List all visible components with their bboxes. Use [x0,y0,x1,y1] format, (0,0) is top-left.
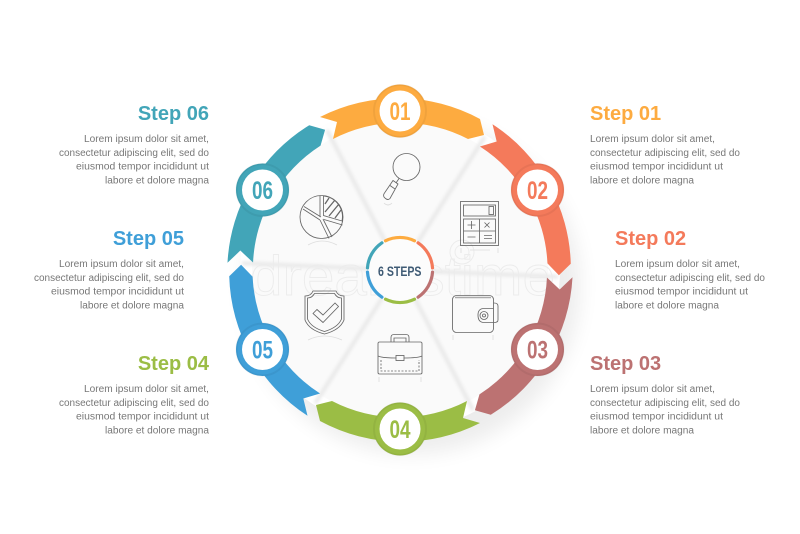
text block: step 02 [615,228,765,311]
badge 06: 06 [252,177,273,205]
icon: magnifier [384,154,420,205]
text block: step 02: Step 02 [615,228,686,250]
ring segment 04 [316,401,480,442]
badge 01: 01 [390,98,411,126]
ring segment 06 [211,111,329,274]
text block: step 05: Step 05 [113,228,184,250]
text block: step 03: eiusmod tempor incididunt ut [590,412,723,423]
text block: step 05: Lorem ipsum dolor sit amet, [59,259,184,270]
text block: step 06: eiusmod tempor incididunt ut [76,162,209,173]
text block: step 03: labore et dolore magna [590,425,694,436]
text block: step 01 [590,103,740,186]
badge 04 [374,402,426,456]
text block: step 02: Lorem ipsum dolor sit amet, [615,259,740,270]
text block: step 01: labore et dolore magna [590,175,694,186]
text block: step 06: labore et dolore magna [105,175,209,186]
badge 02: 02 [527,177,548,205]
ring segment 02 [473,115,591,277]
centre hub: 6 steps: 6 STEPS [378,263,422,279]
badge 01 [374,84,426,138]
text block: step 01: Step 01 [590,103,661,125]
text block: step 01: Lorem ipsum dolor sit amet, [590,134,715,145]
icon: shield with check [305,291,344,340]
badge 03: 03 [527,336,548,364]
text block: step 06: Step 06 [138,103,209,125]
text block: step 02: consectetur adipiscing elit, sed do [615,273,765,284]
text block: step 04: Lorem ipsum dolor sit amet, [84,384,209,395]
text block: step 02: labore et dolore magna [615,300,719,311]
icon: briefcase [378,334,422,382]
text block: step 06: Lorem ipsum dolor sit amet, [84,134,209,145]
text block: step 06: consectetur adipiscing elit, sed do [59,148,209,159]
central disc with wedges [240,110,560,430]
text block: step 04: eiusmod tempor incididunt ut [76,412,209,423]
text block: step 06 [59,103,209,186]
text block: step 04: Step 04 [138,353,210,375]
text block: step 05: eiusmod tempor incididunt ut [51,287,184,298]
text block: step 01: consectetur adipiscing elit, sed do [590,148,740,159]
text block: step 05: consectetur adipiscing elit, sed do [34,273,184,284]
ring drop shadow [244,118,580,454]
text block: step 01: eiusmod tempor incididunt ut [590,162,723,173]
watermark: dreamstime [250,244,555,307]
text block: step 04 [59,353,210,436]
ring segment 01 [320,98,484,139]
badge 05 [236,323,289,376]
text block: step 04: consectetur adipiscing elit, sed do [59,398,209,409]
text block: step 05: labore et dolore magna [80,300,184,311]
icon: wallet [452,296,498,340]
ring segment 05 [209,263,327,425]
icon: calculator [460,202,498,253]
badge 05: 05 [252,336,273,364]
icon: pie chart [300,196,343,245]
ring segment 03 [471,266,589,429]
text block: step 02: eiusmod tempor incididunt ut [615,287,748,298]
text block: step 03: consectetur adipiscing elit, sed do [590,398,740,409]
text block: step 03 [590,353,740,436]
badge 04: 04 [390,416,411,444]
text block: step 05 [34,228,184,311]
text block: step 03: Lorem ipsum dolor sit amet, [590,384,715,395]
text block: step 04: labore et dolore magna [105,425,209,436]
text block: step 03: Step 03 [590,353,661,375]
centre hub: 6 steps [365,236,435,304]
badge 06 [236,164,289,216]
badge 02 [511,164,564,216]
badge 03 [511,323,564,376]
